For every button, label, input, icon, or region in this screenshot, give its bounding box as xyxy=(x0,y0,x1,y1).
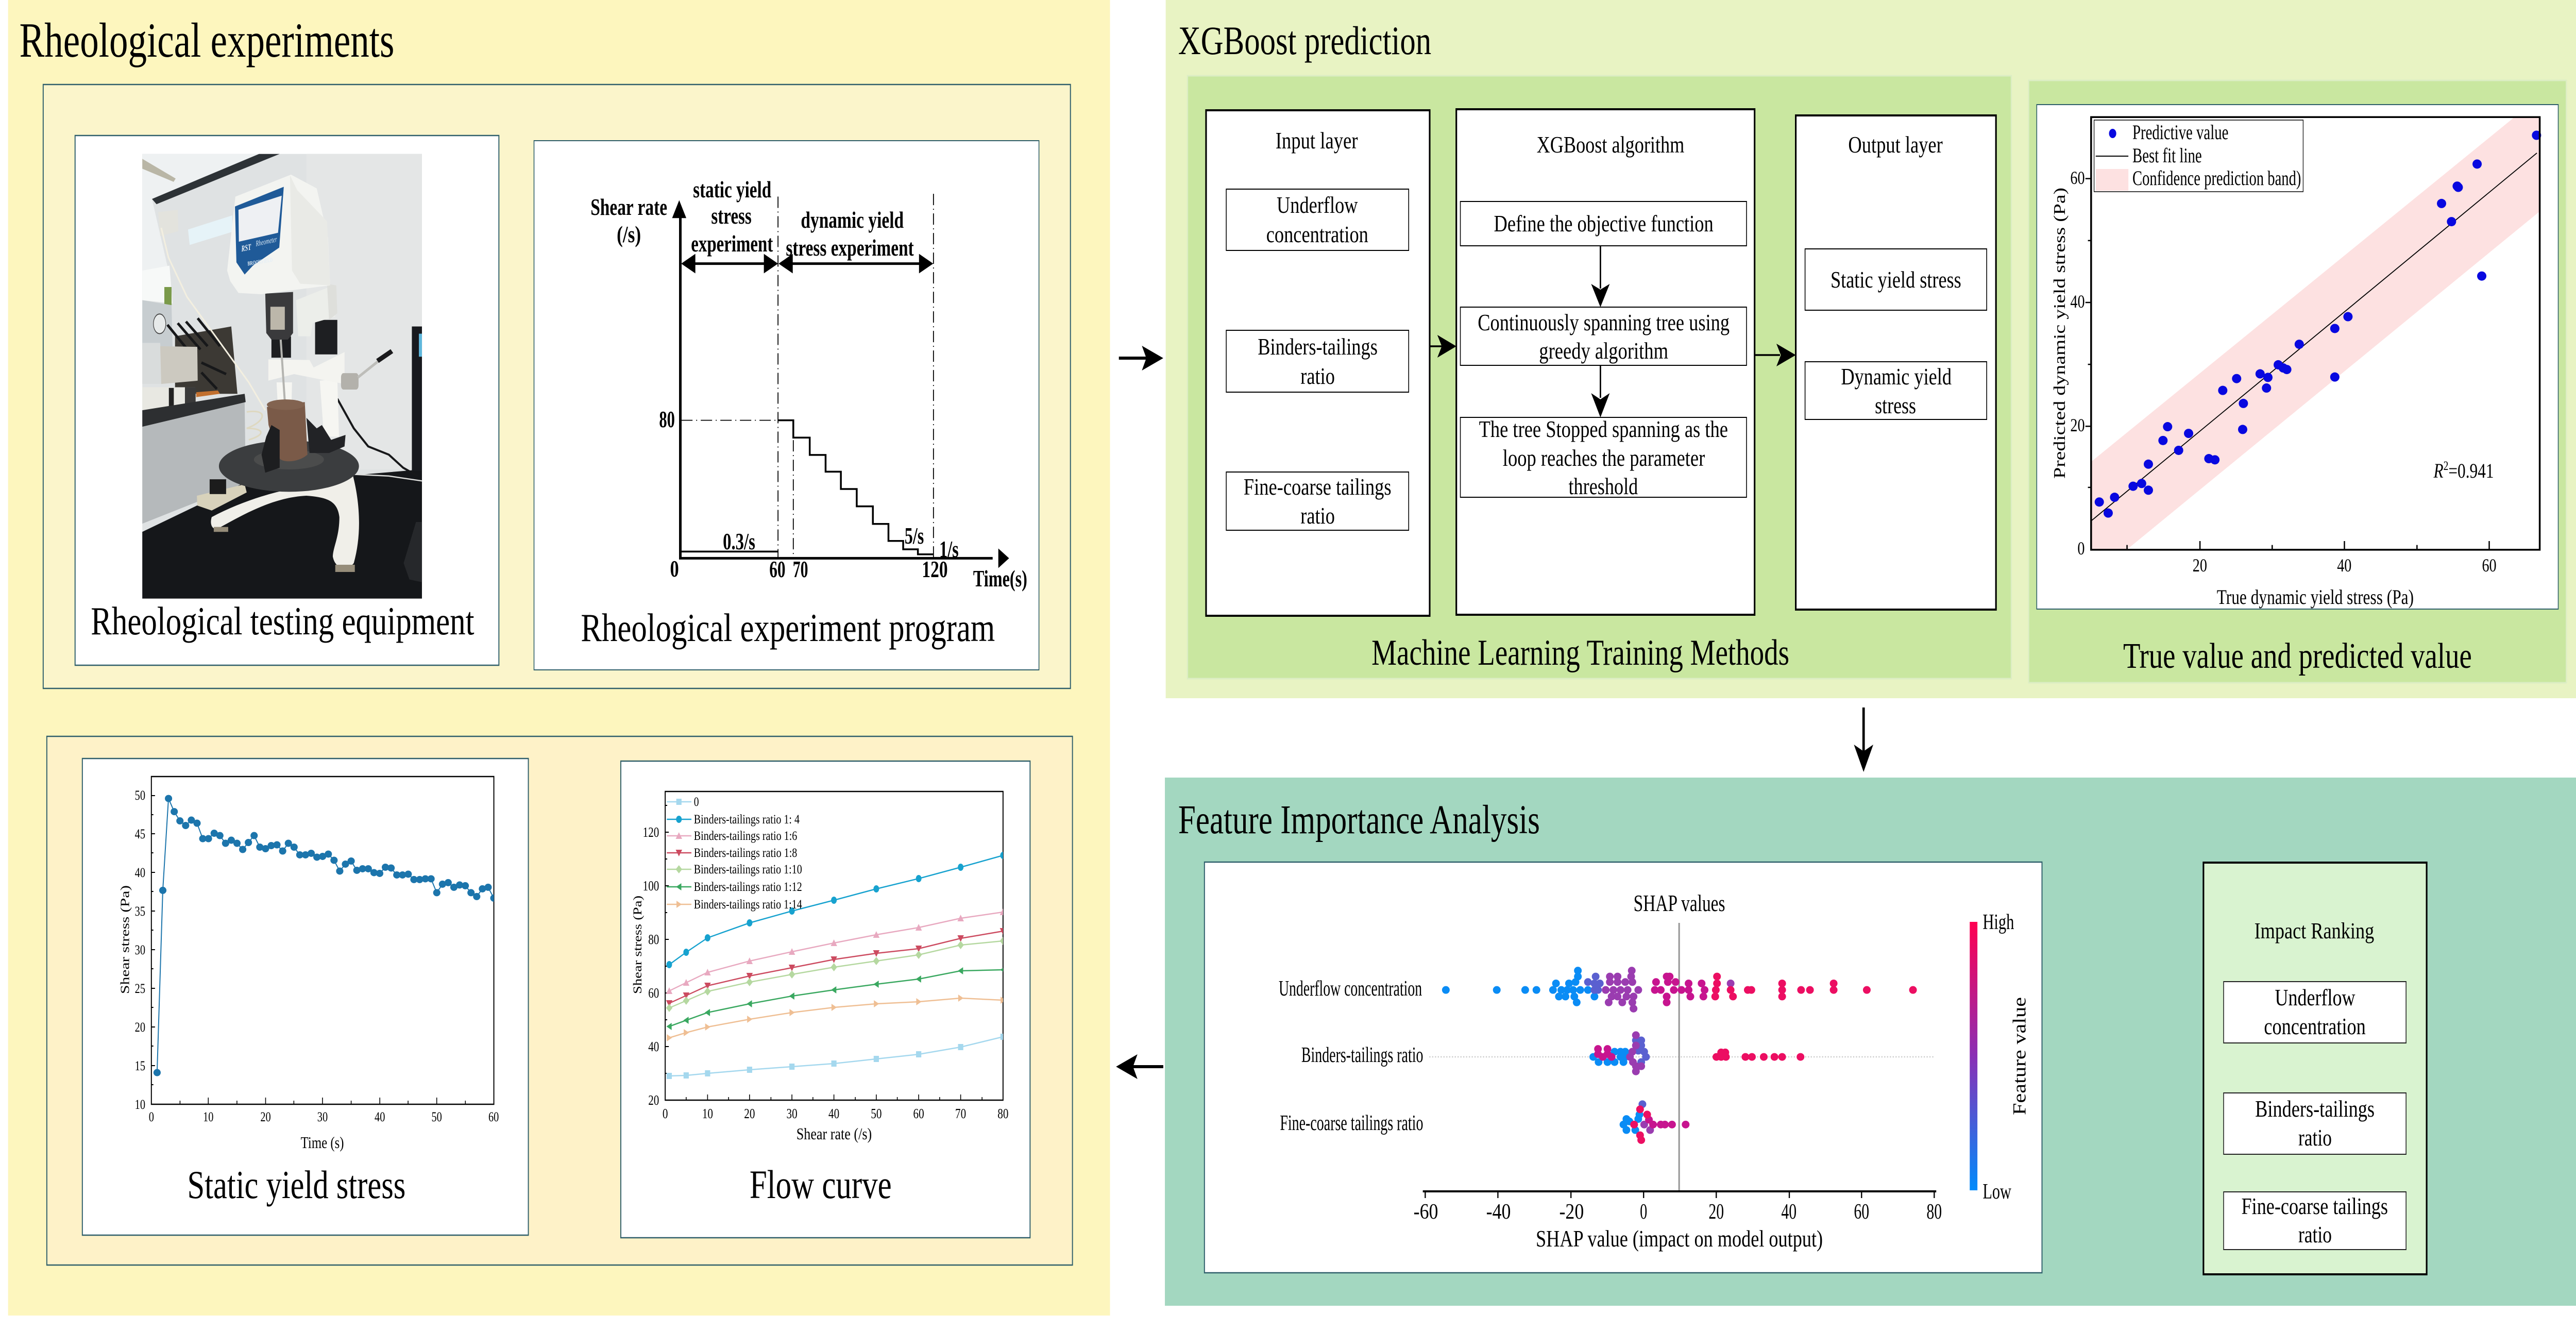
chart: flow curves: 60 xyxy=(913,1106,924,1122)
chart: shap beeswarm: Underflow concentration xyxy=(1279,976,1422,1001)
chart: static shear stress over time: 50 xyxy=(135,788,145,803)
panel: yield stress and flow curve xyxy=(47,736,1073,1265)
chart: shear rate program: (/s) xyxy=(617,221,641,248)
chart: flow curves: 80 xyxy=(997,1106,1008,1122)
chart: flow curves: 50 xyxy=(871,1106,882,1122)
instrument columns and bracket xyxy=(320,379,339,436)
chart: true vs predicted scatter: 60 xyxy=(2070,167,2085,188)
legend: scatter: Predictive value xyxy=(2132,121,2228,144)
arrow: spanning to stop xyxy=(1591,365,1609,417)
arrow: objective to spanning xyxy=(1591,246,1609,307)
legend: feature value colour bar: Low xyxy=(1982,1180,2012,1204)
legend: binder ratios: Binders-tailings ratio 1:6 xyxy=(694,829,797,843)
caption: true value and predicted value: True value and predicted value xyxy=(2123,636,2472,676)
chart: shear rate program: 1/s xyxy=(939,536,959,562)
panel: xgboost prediction xyxy=(1166,0,2576,698)
chart: shear rate program: 120 xyxy=(922,556,948,582)
chart: shear rate program: 80 xyxy=(659,406,675,432)
chart: shap beeswarm: -60 xyxy=(1414,1200,1438,1224)
chart: static shear stress over time: 60 xyxy=(488,1110,499,1125)
step: spanning tree xyxy=(1461,307,1747,365)
chart: shear rate program: stress xyxy=(711,203,752,229)
rheometer head xyxy=(227,175,330,294)
chart: flow curves xyxy=(631,791,1008,1143)
output: dynamic yield stress: stress xyxy=(1875,392,1916,418)
chart: flow curves: 120 xyxy=(643,825,659,840)
chart: shap beeswarm: 60 xyxy=(1854,1200,1869,1224)
chart: true vs predicted scatter: 20 xyxy=(2193,555,2207,576)
arrow: rheological to xgboost xyxy=(1119,346,1163,370)
chart: static shear stress over time: 20 xyxy=(135,1020,145,1035)
chart: shear rate program: 5/s xyxy=(905,523,924,549)
caption: machine learning training methods: Machine Learning Training Methods xyxy=(1371,632,1789,673)
step: stop condition xyxy=(1461,416,1747,499)
chart: shap beeswarm: 40 xyxy=(1781,1200,1797,1224)
block: input layer: Input layer xyxy=(1276,127,1358,154)
panel: rheological experiment program xyxy=(534,141,1039,670)
heading: xgboost prediction: XGBoost prediction xyxy=(1178,19,1431,63)
input: fine-coarse tailings ratio xyxy=(1226,472,1409,530)
legend: binder ratios: Binders-tailings ratio 1:8 xyxy=(694,846,797,860)
input: fine-coarse tailings ratio: ratio xyxy=(1300,502,1335,529)
chart: static shear stress over time: 40 xyxy=(135,866,145,881)
input: binders-tailings ratio xyxy=(1226,330,1409,392)
photo: rheometer on bench xyxy=(142,154,422,599)
heading: rheological experiments: Rheological experiments xyxy=(20,14,394,68)
chart: flow curves: Shear stress (Pa) xyxy=(631,896,644,994)
rank: underflow concentration: concentration xyxy=(2264,1013,2366,1039)
rank: fine-coarse tailings ratio xyxy=(2224,1192,2406,1250)
arrow: algorithm to output xyxy=(1755,344,1796,366)
chart: shear rate program: 70 xyxy=(793,556,808,582)
chart: static shear stress over time xyxy=(118,777,499,1152)
panel: shap values: SHAP values xyxy=(1634,890,1725,916)
chart: true vs predicted scatter: 2 xyxy=(2444,459,2448,473)
chart: flow curves: 70 xyxy=(955,1106,966,1122)
base: white stand xyxy=(211,471,359,568)
block: xgboost algorithm: XGBoost algorithm xyxy=(1537,131,1684,158)
chart: true vs predicted scatter: =0.941 xyxy=(2448,459,2494,482)
clamps xyxy=(262,425,280,473)
panel: true value and predicted value xyxy=(2029,80,2566,683)
chart: static shear stress over time: 25 xyxy=(135,982,145,997)
chart: flow curves: 30 xyxy=(787,1106,798,1122)
confidence band xyxy=(2091,117,2540,550)
chart: flow curves: 40 xyxy=(828,1106,839,1122)
step: stop condition: loop reaches the parameter xyxy=(1503,445,1705,471)
chart: static shear stress over time: Shear stress (Pa) xyxy=(118,885,132,994)
legend: binder ratios: Binders-tailings ratio 1:14 xyxy=(694,897,802,912)
photo: rheometer on bench: BROOKFIELD xyxy=(247,257,273,267)
chart: flow curves: 0 xyxy=(663,1106,668,1122)
step: objective function xyxy=(1461,201,1747,246)
rank: underflow concentration: Underflow xyxy=(2275,984,2355,1010)
chart: shear rate program: stress experiment xyxy=(786,234,914,261)
panel: rheological testing equipment xyxy=(75,136,499,665)
panel: flow curve xyxy=(621,761,1030,1238)
caption: rheological experiment program: Rheological experiment program xyxy=(581,605,995,650)
input: underflow concentration: Underflow xyxy=(1277,192,1358,218)
chart: static shear stress over time: 20 xyxy=(260,1110,271,1125)
input: underflow concentration xyxy=(1226,189,1409,250)
chart: static shear stress over time: 10 xyxy=(135,1098,145,1113)
step: spanning tree: Continuously spanning tree using xyxy=(1478,309,1730,335)
step: objective function: Define the objective function xyxy=(1494,210,1714,237)
panel: static yield stress xyxy=(82,759,529,1235)
rank: binders-tailings ratio xyxy=(2224,1093,2406,1154)
legend: scatter: Best fit line xyxy=(2132,144,2202,167)
legend: feature value colour bar: High xyxy=(1982,910,2014,934)
legend: binder ratios xyxy=(667,795,802,912)
block: output layer: Output layer xyxy=(1848,131,1943,158)
legend: binder ratios: Binders-tailings ratio 1:10 xyxy=(694,862,802,877)
chart: flow curves: Shear rate (/s) xyxy=(796,1125,872,1143)
caption: flow curve: Flow curve xyxy=(750,1163,892,1207)
input: binders-tailings ratio: Binders-tailings xyxy=(1258,333,1378,360)
photo: rheometer on bench: RST xyxy=(241,242,251,254)
arrow: xgboost to feature importance xyxy=(1854,707,1873,772)
chart: static shear stress over time: 30 xyxy=(135,943,145,958)
chart: shear rate program: dynamic yield xyxy=(801,207,904,233)
step: stop condition: threshold xyxy=(1569,473,1638,499)
chart: static shear stress over time: 15 xyxy=(135,1059,145,1074)
chart: shap beeswarm: 0 xyxy=(1640,1200,1647,1224)
chart: shap beeswarm: Fine-coarse tailings ratio xyxy=(1280,1111,1423,1135)
legend: scatter xyxy=(2094,120,2303,192)
chart: shear rate program: experiment xyxy=(691,230,773,257)
legend: binder ratios: Binders-tailings ratio 1:12 xyxy=(694,880,802,894)
chart: true vs predicted scatter: R xyxy=(2433,459,2444,482)
rank: binders-tailings ratio: ratio xyxy=(2298,1124,2332,1151)
chart: shap beeswarm: SHAP value (impact on model output) xyxy=(1536,1225,1823,1252)
chart: shap beeswarm: Binders-tailings ratio xyxy=(1301,1043,1423,1067)
legend: binder ratios: 0 xyxy=(694,795,699,809)
panel: machine learning training methods xyxy=(1188,76,2011,679)
legend: binder ratios: Binders-tailings ratio 1: 4 xyxy=(694,812,800,827)
chart: static shear stress over time: 10 xyxy=(203,1110,213,1125)
block: output layer xyxy=(1796,115,1996,610)
arrow: feature importance to rheological xyxy=(1116,1054,1163,1079)
legend: feature value colour bar: Feature value xyxy=(2009,997,2029,1115)
chart: true vs predicted scatter: 0 xyxy=(2077,538,2085,559)
chart: shear rate program: 0.3/s xyxy=(723,528,755,554)
chart: shap beeswarm: -40 xyxy=(1486,1200,1511,1224)
legend: scatter: Confidence prediction band) xyxy=(2132,166,2301,190)
disk xyxy=(219,441,359,492)
chart: static shear stress over time: Time (s) xyxy=(301,1134,344,1152)
chart: shear rate program xyxy=(590,176,1027,592)
chart: true vs predicted scatter: 40 xyxy=(2070,291,2085,312)
input: fine-coarse tailings ratio: Fine-coarse tailings xyxy=(1244,474,1392,500)
arrow: input to algorithm xyxy=(1430,335,1456,358)
panel: shap values xyxy=(1205,862,2042,1273)
chart: shear rate program: static yield xyxy=(693,176,771,203)
chart: flow curves: 40 xyxy=(648,1039,659,1055)
chart: true vs predicted scatter: 60 xyxy=(2482,555,2497,576)
chart: true vs predicted scatter: Predicted dynamic yield stress (Pa) xyxy=(2050,188,2069,479)
output: static yield stress: Static yield stress xyxy=(1831,266,1961,293)
chart: static shear stress over time: 45 xyxy=(135,827,145,842)
caption: rheological testing equipment: Rheological testing equipment xyxy=(91,599,474,643)
chart: flow curves: 100 xyxy=(643,879,659,894)
chart: static shear stress over time: 40 xyxy=(375,1110,385,1125)
chart: shap beeswarm: 80 xyxy=(1926,1200,1942,1224)
chart: flow curves: 60 xyxy=(648,986,659,1001)
input: binders-tailings ratio: ratio xyxy=(1300,363,1335,389)
rank: binders-tailings ratio: Binders-tailings xyxy=(2255,1096,2375,1122)
chart: shap beeswarm: 20 xyxy=(1708,1200,1724,1224)
chart: flow curves: 80 xyxy=(648,932,659,948)
chart: true vs predicted scatter xyxy=(2050,117,2540,609)
chart: shear rate program: Time(s) xyxy=(973,565,1027,592)
block: input layer xyxy=(1206,110,1430,616)
chart: flow curves: 10 xyxy=(702,1106,713,1122)
chart: shap beeswarm: -20 xyxy=(1559,1200,1584,1224)
input: underflow concentration: concentration xyxy=(1266,221,1368,247)
brown sample cylinder xyxy=(267,402,308,461)
output: dynamic yield stress xyxy=(1805,362,1987,419)
chart: flow curves: 20 xyxy=(648,1093,659,1108)
heading: feature importance analysis: Feature Importance Analysis xyxy=(1178,798,1540,843)
panel: equipment and program xyxy=(43,85,1071,688)
chart: static shear stress over time: 0 xyxy=(149,1110,154,1125)
chart: true vs predicted scatter: 20 xyxy=(2070,415,2085,435)
output: static yield stress xyxy=(1805,249,1987,310)
chart: true vs predicted scatter: 40 xyxy=(2337,555,2351,576)
rank: fine-coarse tailings ratio: Fine-coarse tailings xyxy=(2242,1193,2388,1219)
chart: shap beeswarm xyxy=(1279,923,1942,1252)
chart: true vs predicted scatter: True dynamic yield stress (Pa) xyxy=(2217,585,2414,609)
rod and knob xyxy=(281,340,285,401)
legend: feature value colour bar xyxy=(1970,910,2029,1204)
photo: rheometer on bench: Rheometer xyxy=(255,235,277,248)
chart: shear rate program: 0 xyxy=(670,555,679,582)
chart: static shear stress over time: 35 xyxy=(135,904,145,919)
output: dynamic yield stress: Dynamic yield xyxy=(1841,363,1952,390)
chart: static shear stress over time: 30 xyxy=(317,1110,328,1125)
rank: fine-coarse tailings ratio: ratio xyxy=(2298,1221,2332,1248)
panel: impact ranking: Impact Ranking xyxy=(2255,918,2374,944)
chart: flow curves: 20 xyxy=(744,1106,755,1122)
rank: underflow concentration xyxy=(2224,982,2406,1043)
panel: feature importance analysis xyxy=(1165,778,2576,1306)
panel: impact ranking xyxy=(2204,863,2427,1274)
chart: shear rate program: 60 xyxy=(769,556,786,582)
block: xgboost algorithm xyxy=(1456,109,1755,615)
step: stop condition: The tree Stopped spanning as the xyxy=(1479,416,1728,442)
step: spanning tree: greedy algorithm xyxy=(1539,338,1668,364)
chart: static shear stress over time: 50 xyxy=(432,1110,442,1125)
chart: shear rate program: Shear rate xyxy=(590,194,667,220)
caption: static yield stress: Static yield stress xyxy=(188,1162,405,1207)
